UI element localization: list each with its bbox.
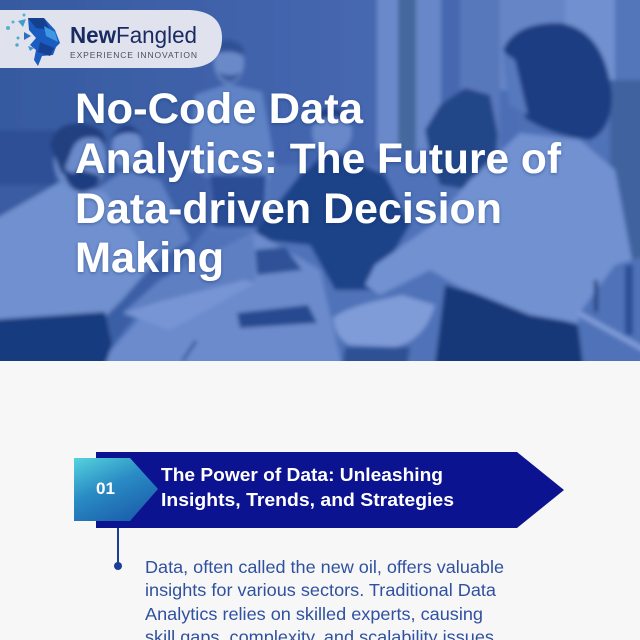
timeline connector and dot (114, 528, 122, 570)
section body text (145, 557, 504, 640)
chair (333, 295, 435, 347)
title: Data-driven Decision (75, 185, 502, 233)
woman standing (434, 284, 584, 361)
table, laptops and tablet (104, 230, 342, 361)
section heading (161, 464, 454, 510)
section heading: The Power of Data: Unleashing (161, 464, 443, 485)
bookshelf (578, 257, 640, 361)
title: Analytics: The Future of (75, 135, 562, 183)
bearded man (0, 182, 155, 335)
icon: polygon head logo (6, 14, 60, 66)
section number tab: 01 (96, 479, 115, 498)
plant (425, 88, 498, 190)
title: Making (75, 234, 224, 282)
section number tab (74, 458, 158, 521)
standing man (190, 84, 276, 230)
seated man in dark sweater (255, 150, 410, 290)
title: No-Code Data (75, 85, 364, 133)
logo tagline: EXPERIENCE INNOVATION (70, 50, 197, 60)
title (75, 85, 562, 282)
logo wordmark: NewFangled (70, 22, 197, 48)
section 01 banner arrow (74, 452, 564, 528)
section body text: Data, often called the new oil, offers valuable (145, 557, 504, 577)
logo pill (0, 10, 222, 68)
hero photo: office meeting with blue tint (0, 0, 640, 380)
section body text: Analytics relies on skilled experts, causing (145, 604, 483, 624)
section body text: insights for various sectors. Traditional Data (145, 580, 496, 600)
section heading: Insights, Trends, and Strategies (161, 489, 454, 510)
woman seated behind (112, 128, 142, 168)
